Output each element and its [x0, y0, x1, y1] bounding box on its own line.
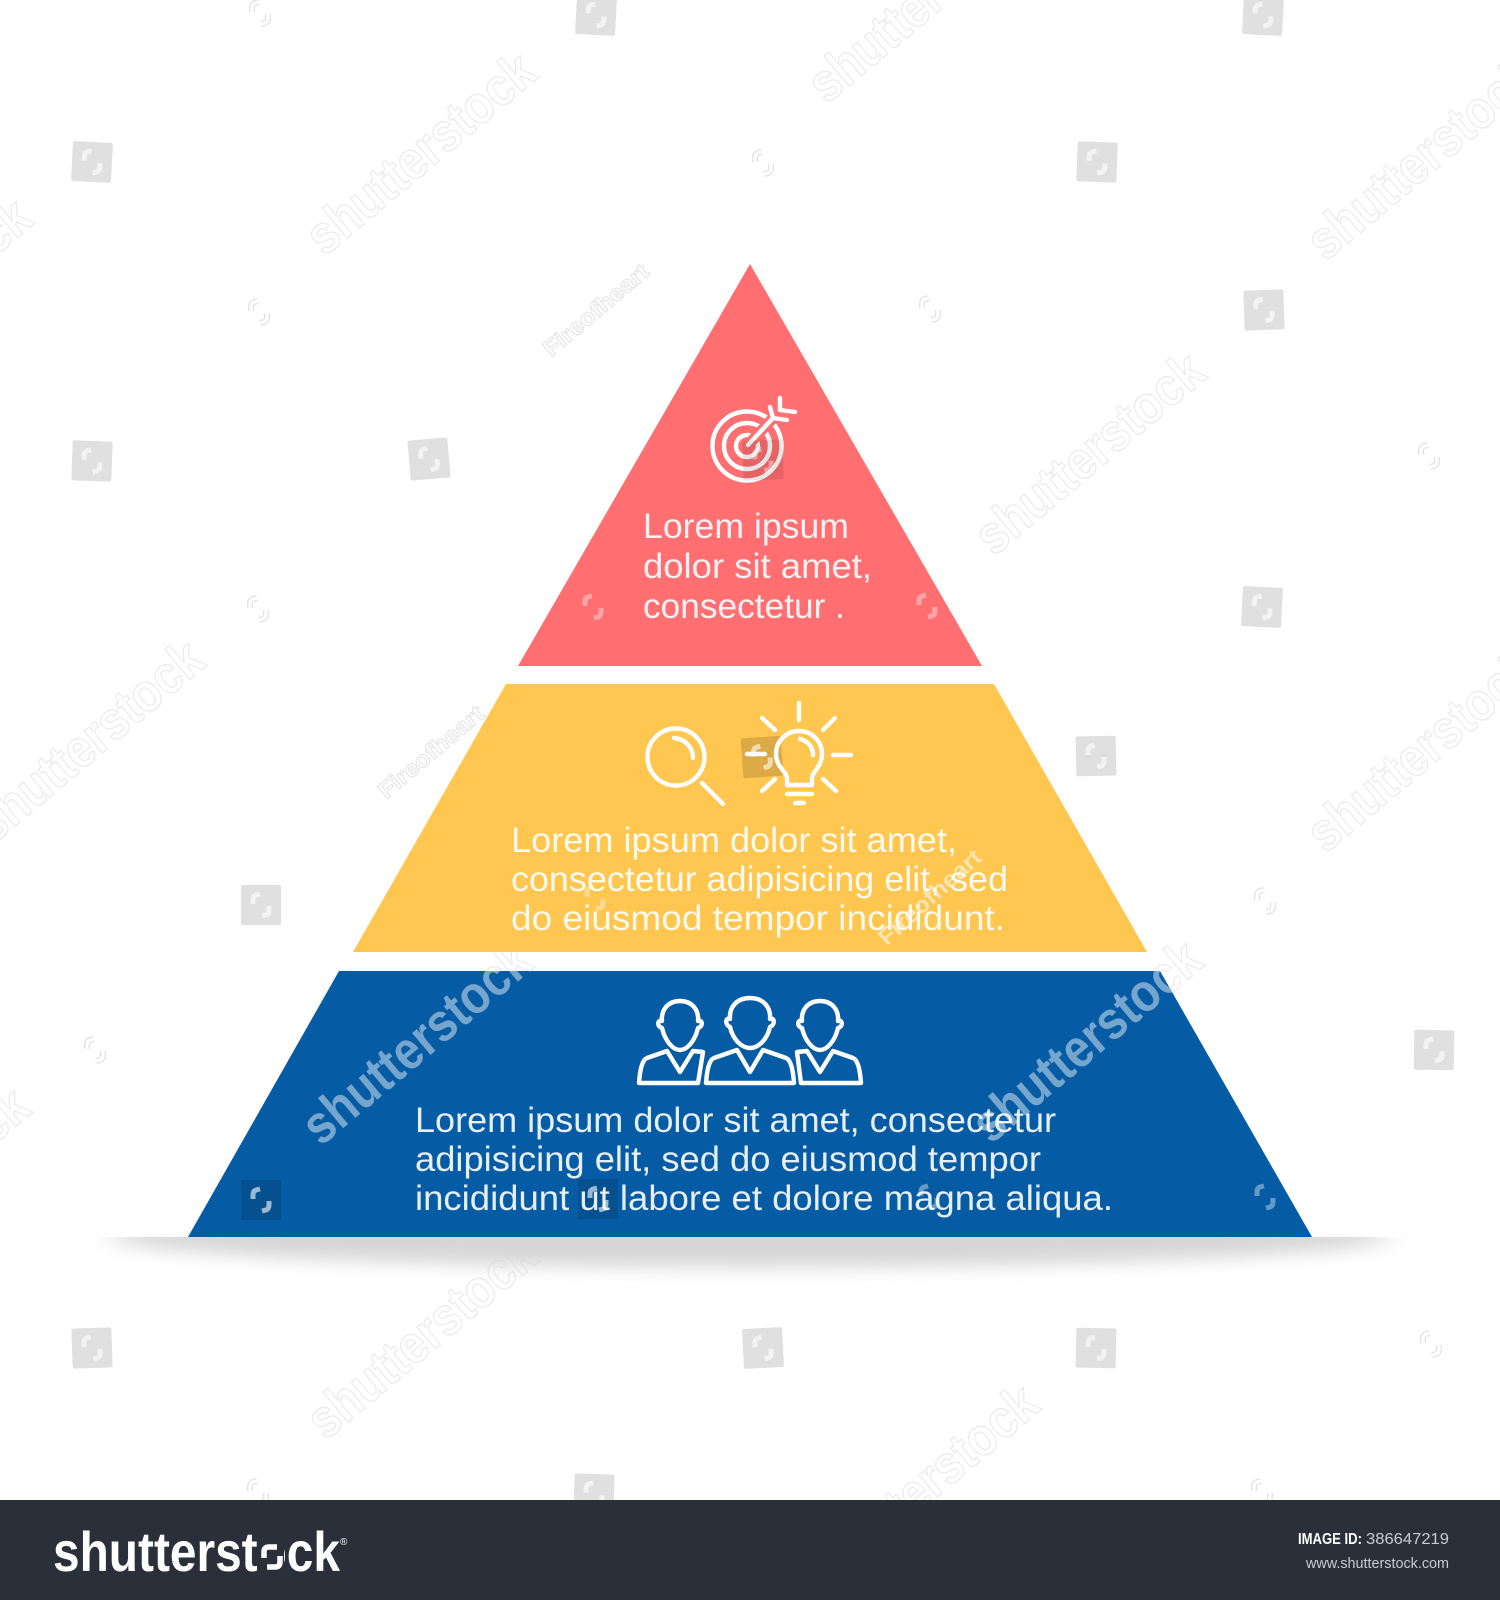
- text: top tier: consectetur .: [643, 587, 845, 626]
- icon: magnifying glass: [648, 728, 723, 804]
- text: middle tier: do eiusmod tempor incididunt.: [511, 899, 1005, 938]
- text: bottom tier: Lorem ipsum dolor sit amet, consectetur: [415, 1101, 1056, 1140]
- footer registered mark: ®: [340, 1537, 348, 1548]
- watermark on yellow: [584, 850, 983, 946]
- text: middle tier: Lorem ipsum dolor sit amet,: [511, 821, 957, 860]
- text: bottom tier: adipisicing elit, sed do eiusmod tempor: [415, 1140, 1041, 1179]
- watermark: shutterstock text on white: Fireofheart: [538, 258, 654, 362]
- watermark tile over target: [742, 439, 784, 481]
- watermark on blue: shutterstock: [960, 928, 1214, 1154]
- footer bar: [0, 1500, 1500, 1600]
- footer logo: shutterstock: [53, 1520, 341, 1583]
- watermark glyphs on red: [585, 595, 935, 618]
- footer image id: 386647219: [1366, 1531, 1449, 1548]
- pyramid ground shadow: [110, 1237, 1390, 1274]
- icon: light bulb: [747, 703, 851, 803]
- watermark: shutterstock text on white: shutterstock: [294, 40, 548, 266]
- watermark: shutterstock text on white: Fireofheart: [373, 700, 489, 804]
- text: bottom tier: [415, 1101, 1113, 1218]
- watermark on blue: [241, 971, 1276, 1220]
- panel: bottom tier (blue): [188, 971, 1312, 1237]
- icon: target with arrow: [712, 398, 795, 480]
- panel: top tier (red): [518, 264, 982, 666]
- watermark tile behind bulb: [741, 736, 783, 778]
- icon: three people: [639, 998, 861, 1083]
- watermark on blue: shutterstock: [290, 930, 544, 1156]
- person: left: [639, 1001, 703, 1083]
- footer website: www.shutterstock.com: [1305, 1555, 1449, 1572]
- text: top tier: [643, 507, 872, 626]
- footer image id: IMAGE ID:: [1298, 1531, 1362, 1548]
- watermark on yellow: Fireofheart: [373, 700, 489, 804]
- text: bottom tier: incididunt ut labore et dolore magna aliqua.: [415, 1179, 1113, 1218]
- text: middle tier: [511, 821, 1008, 938]
- watermark on yellow: Fireofheart: [873, 844, 987, 950]
- watermark: shutterstock text on white: shutterstock: [290, 930, 544, 1156]
- text: top tier: dolor sit amet,: [643, 547, 872, 586]
- text: top tier: Lorem ipsum: [643, 507, 849, 546]
- panel: middle tier (yellow): [353, 684, 1147, 952]
- watermark: shutterstock text on white: shutterstock: [960, 928, 1214, 1154]
- watermark: shutterstock text on white: shutterstock: [963, 340, 1217, 566]
- footer logo glyph: [258, 1539, 284, 1574]
- person: centre: [706, 998, 794, 1083]
- text: middle tier: consectetur adipisicing elit, sed: [511, 860, 1008, 899]
- watermark: shutterstock text on white: shutterstock: [295, 1224, 549, 1450]
- person: right: [797, 1001, 861, 1083]
- watermark: shutterstock text on white: shutterstock: [797, 1372, 1051, 1598]
